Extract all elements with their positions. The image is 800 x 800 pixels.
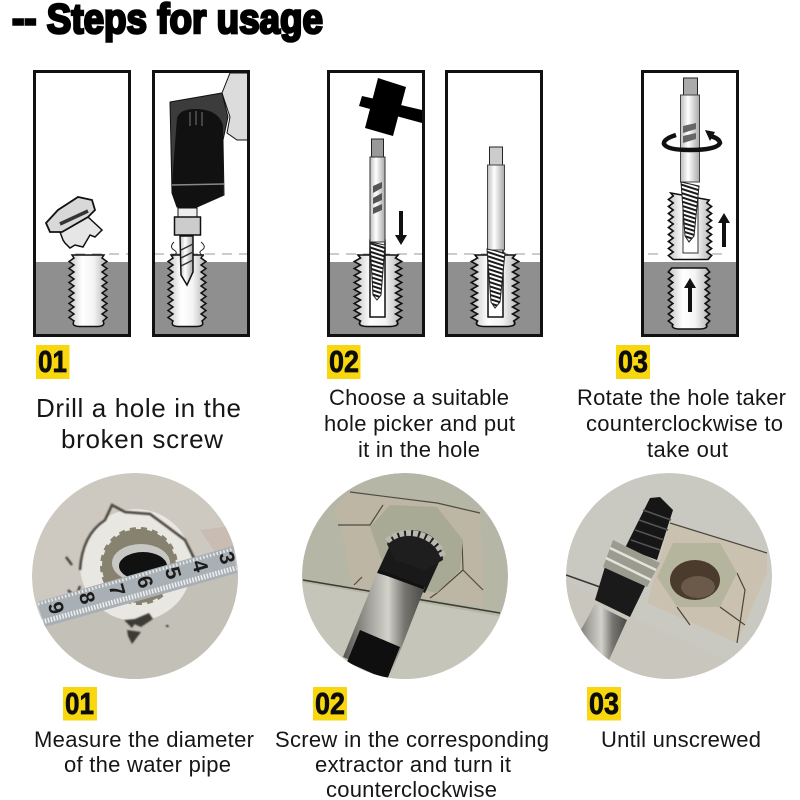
step text: screw in: extractor and turn it <box>315 752 511 777</box>
white fitting <box>80 509 192 621</box>
tape measure: 9 <box>43 599 68 617</box>
silver ring <box>603 540 660 587</box>
threaded hole <box>668 268 710 329</box>
step text: measure: Measure the diameter <box>34 727 254 752</box>
steel shaft <box>343 573 425 677</box>
arrow: down <box>395 211 407 245</box>
step text: choose <box>324 385 515 462</box>
threaded hole <box>354 255 402 326</box>
step text: choose: hole picker and put <box>324 411 515 436</box>
lifted bolt <box>668 193 712 260</box>
pipe opening <box>119 552 167 576</box>
tape measure: 6 <box>132 573 157 591</box>
badge: top 03: 03 <box>618 344 648 379</box>
steel rod <box>581 604 627 660</box>
badge: bottom 03: 03 <box>589 686 619 721</box>
tape measure: 8 <box>74 589 99 607</box>
black sleeve <box>595 568 645 617</box>
tape measure: 5 <box>160 564 185 582</box>
step text: choose: Choose a suitable <box>329 385 509 410</box>
step text: screw in <box>275 727 549 800</box>
badge: top 02: 02 <box>329 344 359 379</box>
arrow: up right <box>718 213 730 247</box>
tape measure: 3 <box>214 549 239 567</box>
broken wall edge <box>66 505 195 598</box>
threaded hole <box>471 255 519 326</box>
step text: drill <box>36 393 241 454</box>
panel: hammer in extractor <box>328 72 424 336</box>
badge: top 01: 01 <box>38 344 67 379</box>
photo: extractor in pipe <box>300 473 510 690</box>
icon: hammer <box>359 78 422 136</box>
photo: measuring the pipe <box>32 473 240 680</box>
icon: rotation arrow <box>664 130 720 150</box>
arrow: up centre <box>684 278 696 312</box>
photo: extracted screw <box>566 473 772 680</box>
step text: screw in: Screw in the corresponding <box>275 727 549 752</box>
tape measure: 4 <box>187 557 212 575</box>
threaded bolt <box>625 497 673 560</box>
step text: measure: of the water pipe <box>64 752 231 777</box>
threaded hole <box>168 255 206 326</box>
icon: extractor <box>370 139 385 300</box>
icon: extractor <box>680 78 700 242</box>
threaded hole <box>69 255 107 326</box>
badge: bottom 02: 02 <box>315 686 345 721</box>
black collar <box>377 545 440 593</box>
step text: drill: broken screw <box>61 424 223 454</box>
panel: rotate out <box>642 72 738 336</box>
tape measure <box>37 546 239 627</box>
step text: rotate <box>577 385 786 462</box>
nut <box>657 543 737 607</box>
panel: extractor set <box>446 72 542 336</box>
panel: drilling <box>154 72 249 336</box>
step text: measure <box>34 727 254 777</box>
step text: drill: Drill a hole in the <box>36 393 241 423</box>
step text: rotate: Rotate the hole taker <box>577 385 786 410</box>
panel: broken screw <box>34 72 130 336</box>
tiles <box>333 492 483 607</box>
icon: power drill <box>170 93 228 285</box>
icon: broken bolt <box>46 197 102 248</box>
tiles <box>647 523 767 643</box>
nut <box>370 505 463 593</box>
silver ring <box>387 530 443 562</box>
step text: until unscrewed: Until unscrewed <box>601 727 761 752</box>
tape measure: 7 <box>104 581 129 599</box>
icon: extractor <box>487 147 505 308</box>
hex end <box>347 630 400 680</box>
step text: rotate: counterclockwise to <box>586 411 783 436</box>
step text: choose: it in the hole <box>358 437 480 462</box>
gear ring <box>102 529 176 603</box>
step text: rotate: take out <box>647 437 728 462</box>
badge: bottom 01: 01 <box>65 686 94 721</box>
icon: hand <box>222 73 248 140</box>
debris <box>124 613 169 644</box>
